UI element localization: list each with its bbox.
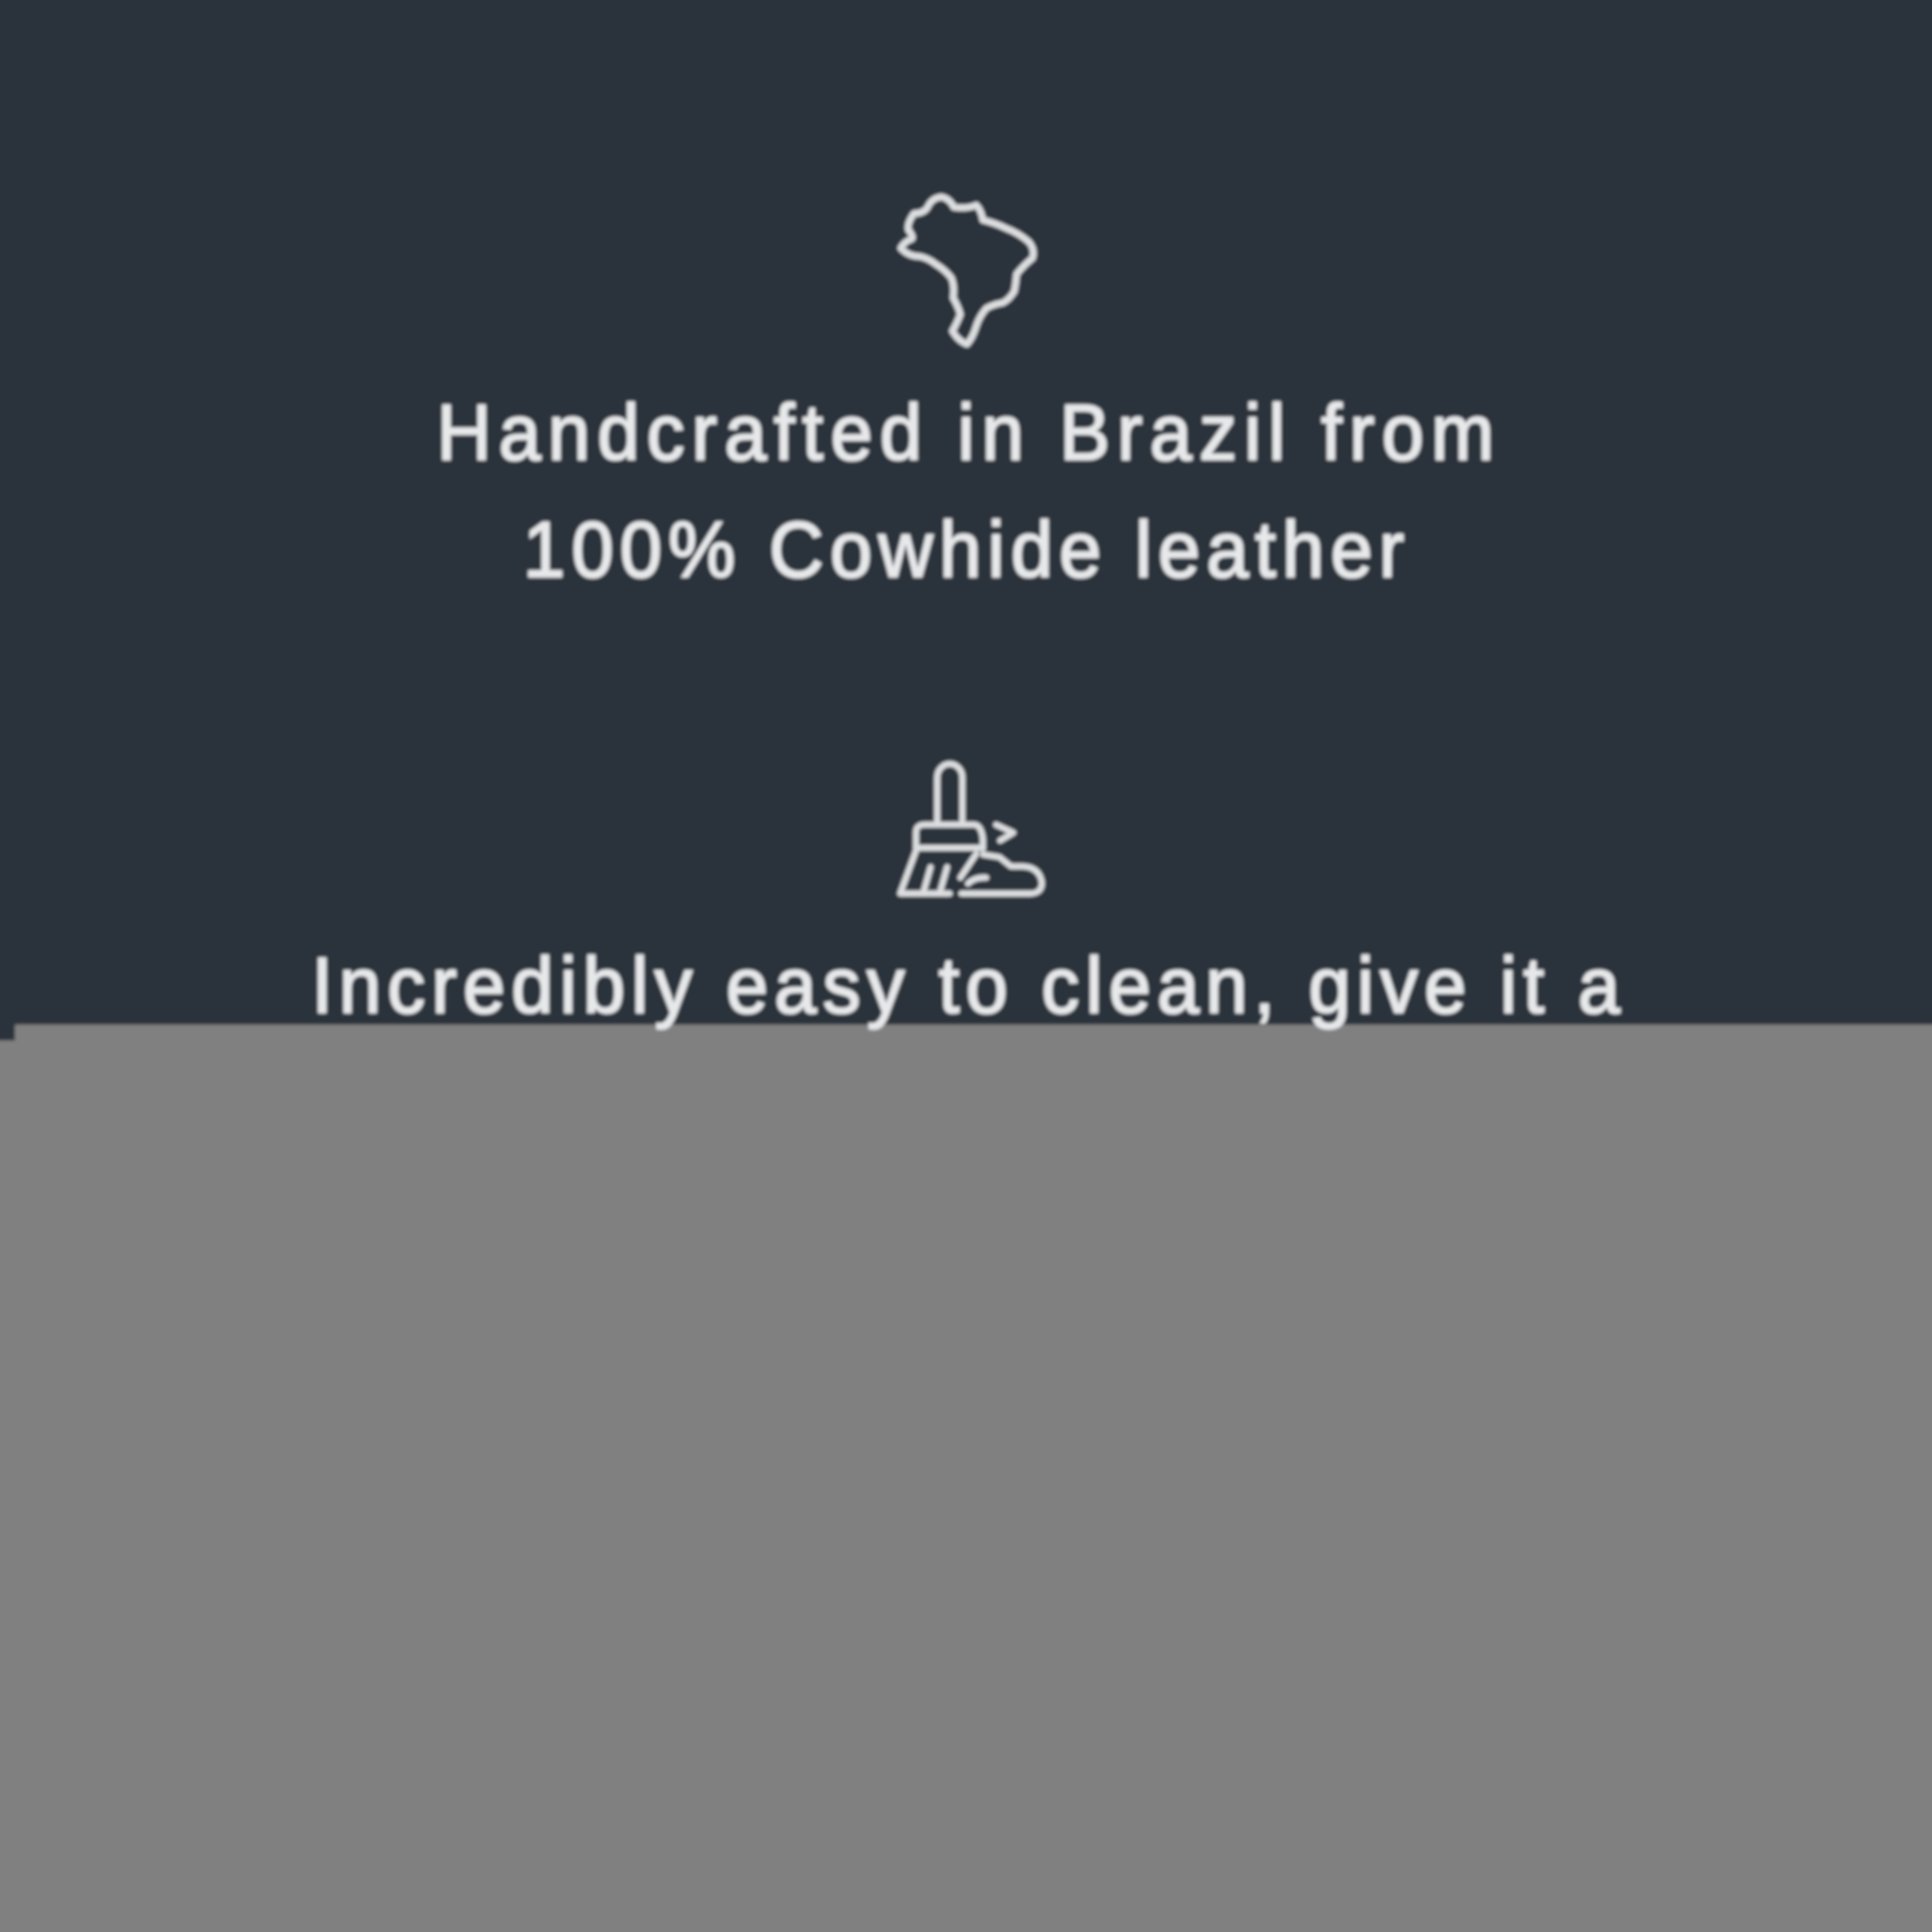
- feature text: easy to clean: Incredibly easy to clean, give it a: [312, 940, 1620, 1030]
- icon: Brazil map outline: [900, 197, 1034, 345]
- feature text: handcrafted in Brazil: [437, 387, 1494, 594]
- icon: broom sweeping dust: [900, 763, 1041, 894]
- feature text: handcrafted in Brazil: 100% Cowhide leather: [523, 504, 1404, 594]
- feature text: handcrafted in Brazil: Handcrafted in Brazil from: [437, 387, 1494, 477]
- grey cover block: [0, 1025, 1932, 1932]
